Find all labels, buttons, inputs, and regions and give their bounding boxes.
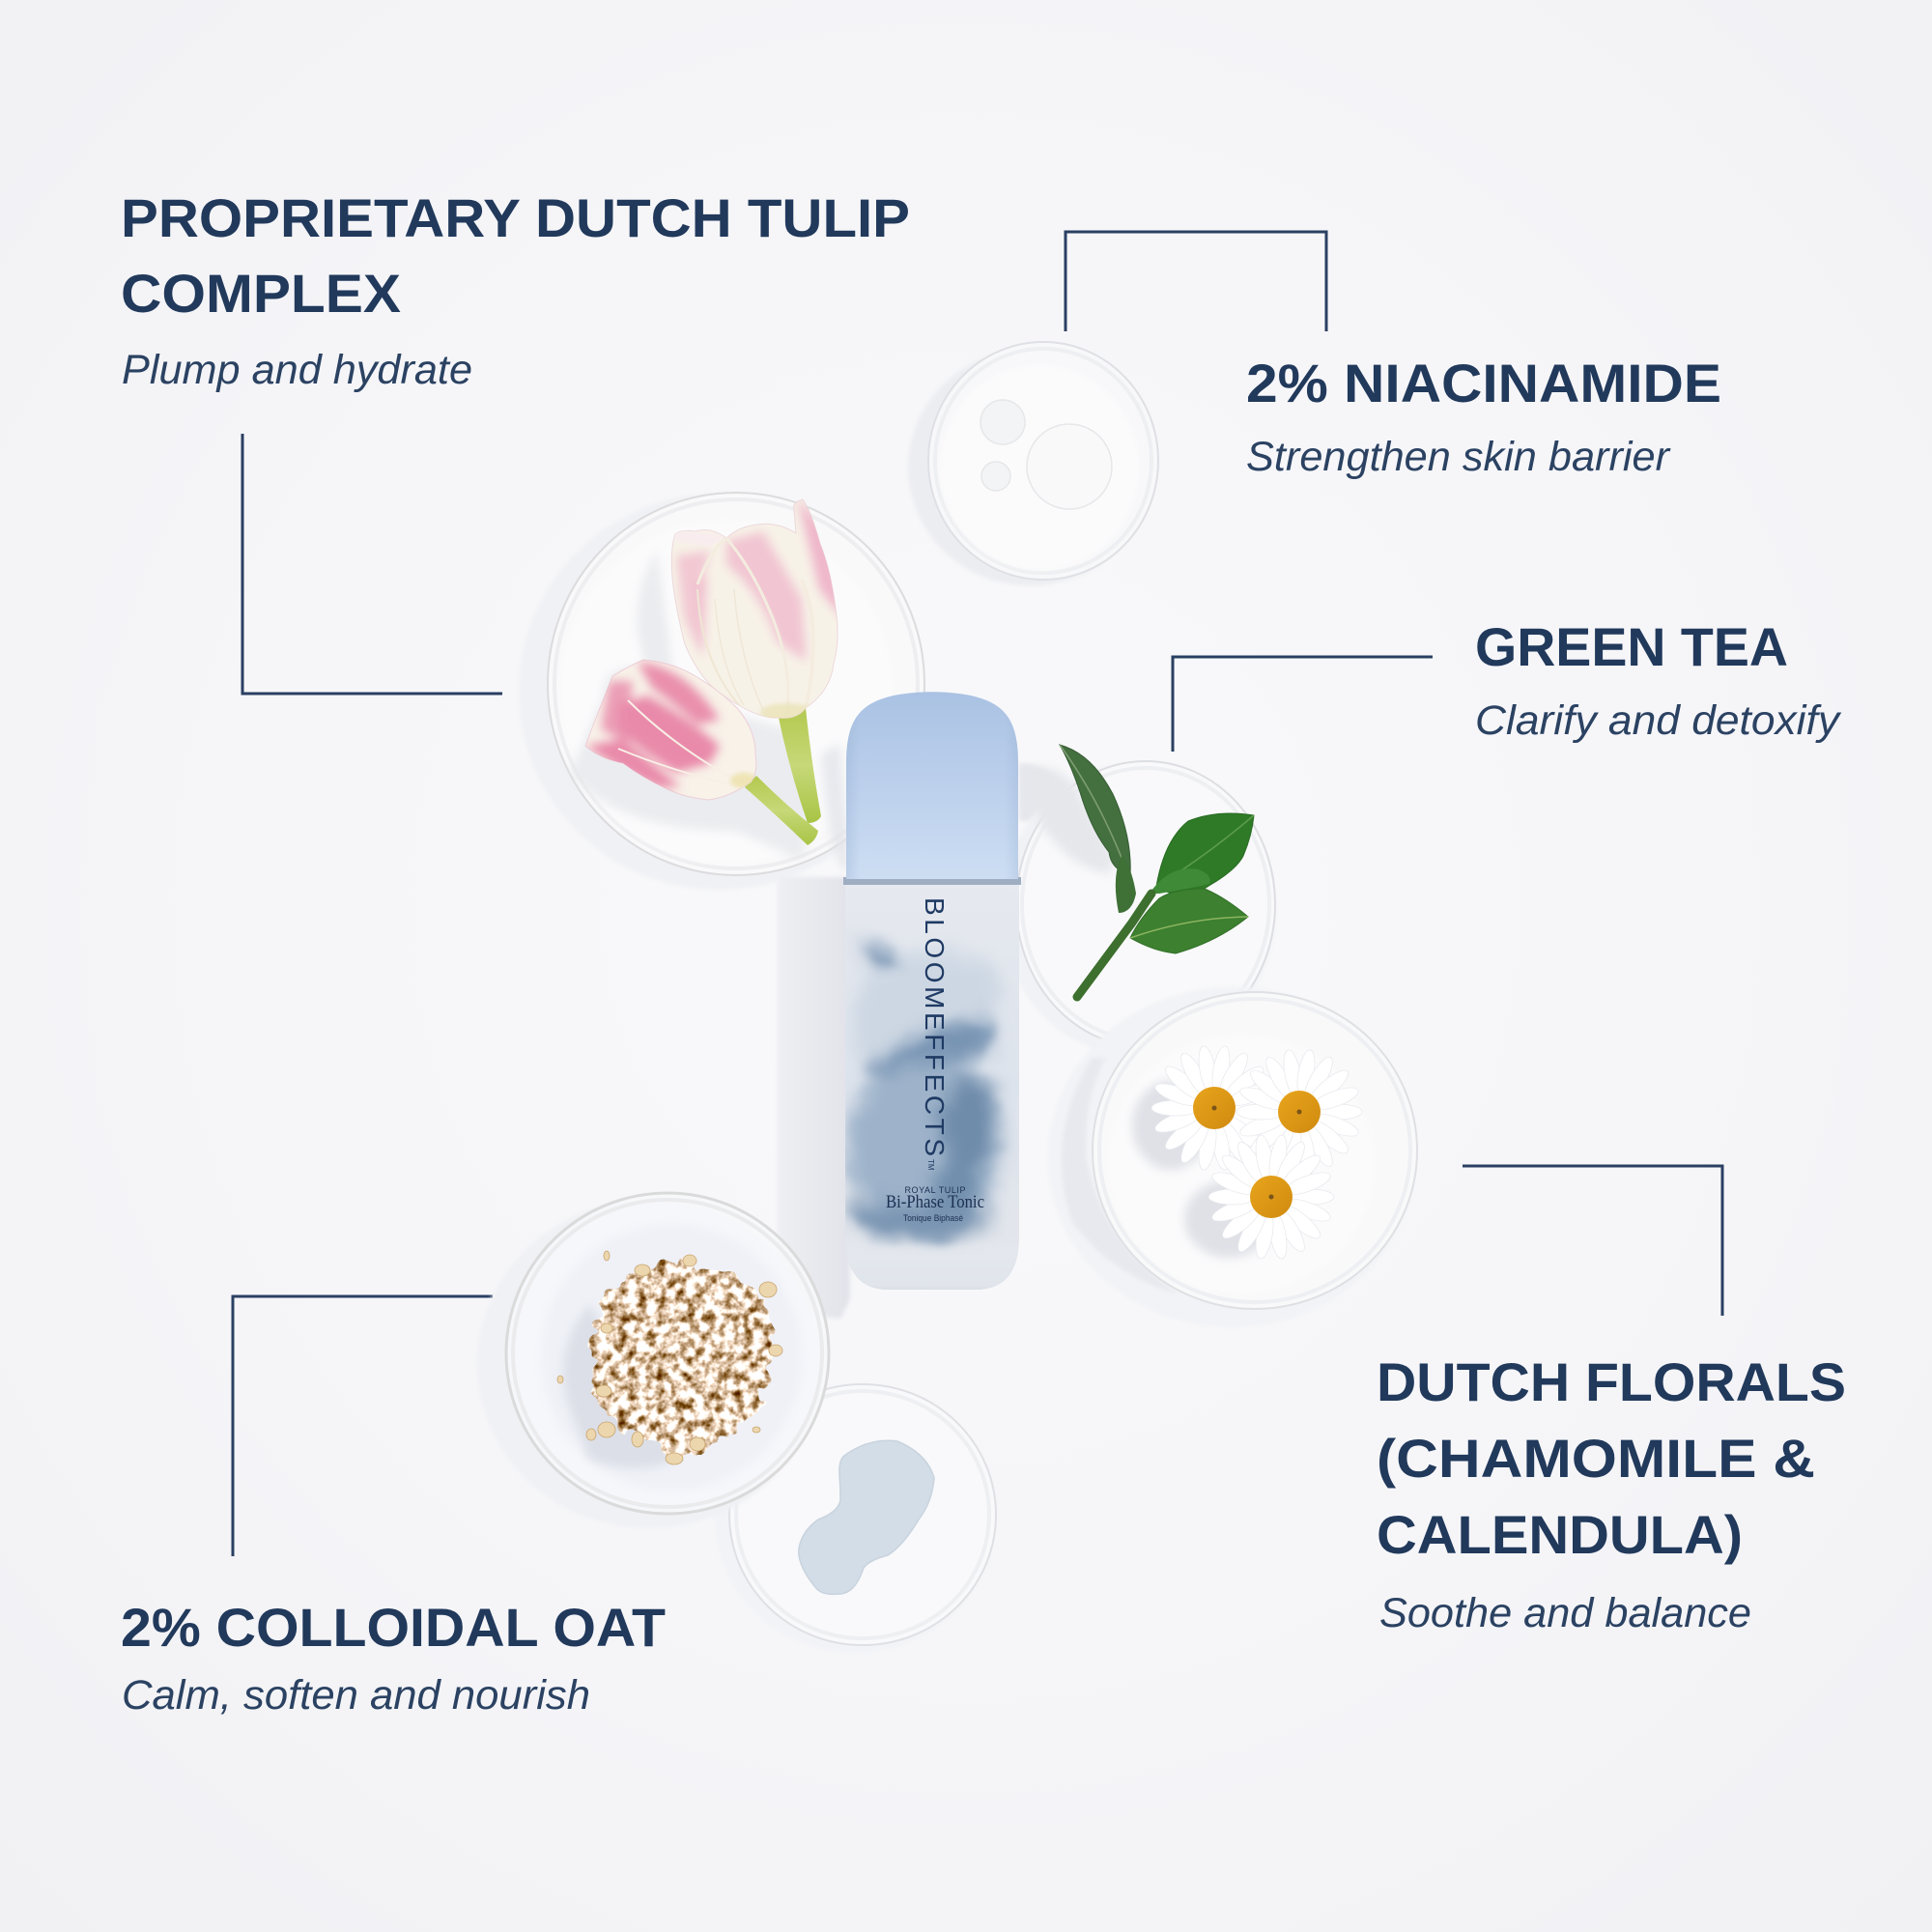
brand name: BLOOMEFFECTS bbox=[920, 897, 950, 1156]
tulip shadows bbox=[570, 551, 850, 870]
daisy 3 bbox=[1208, 1134, 1334, 1260]
petri dish: niacinamide droplets bbox=[908, 342, 1158, 585]
bottle shadow bbox=[778, 877, 850, 1319]
neck band bbox=[843, 877, 1021, 885]
heading block: proprietary dutch tulip complex bbox=[121, 187, 910, 393]
heading block: dutch florals: Soothe and balance bbox=[1379, 1590, 1751, 1636]
petri dish: daisies bbox=[1048, 987, 1417, 1327]
heading block: green tea bbox=[1475, 616, 1842, 744]
infographic canvas bbox=[123, 199, 1844, 1714]
heading block: dutch florals: (CHAMOMILE & bbox=[1377, 1428, 1815, 1489]
cap bbox=[846, 692, 1018, 879]
product labels: Tonique Biphasé bbox=[903, 1213, 963, 1224]
product labels: ROYAL TULIP bbox=[904, 1185, 966, 1195]
product labels bbox=[886, 1185, 984, 1224]
heading block: green tea: GREEN TEA bbox=[1475, 616, 1788, 677]
heading block: dutch florals bbox=[1377, 1351, 1846, 1636]
heading block: dutch florals: CALENDULA) bbox=[1377, 1504, 1743, 1565]
product bottle bbox=[840, 692, 1024, 1293]
marbled smoke bbox=[840, 942, 1024, 1293]
heading block: dutch florals: DUTCH FLORALS bbox=[1377, 1351, 1846, 1412]
upper tulip bbox=[671, 497, 842, 823]
heading block: niacinamide: 2% NIACINAMIDE bbox=[1246, 353, 1721, 413]
daisy shadows bbox=[1132, 1081, 1273, 1258]
heading block: proprietary dutch tulip complex: Plump and hydrate bbox=[122, 347, 472, 393]
tea sprig bbox=[1060, 745, 1254, 997]
petri dish: oats bbox=[477, 1193, 829, 1528]
tonic gel blob bbox=[799, 1440, 934, 1594]
daisy 2 bbox=[1236, 1049, 1362, 1175]
oat shadow bbox=[563, 1304, 676, 1468]
heading block: colloidal oat: Calm, soften and nourish bbox=[122, 1672, 590, 1719]
side shadow near cap bbox=[1019, 763, 1061, 821]
heading block: colloidal oat: 2% COLLOIDAL OAT bbox=[121, 1597, 666, 1658]
frosted body bbox=[845, 881, 1019, 1290]
heading block: niacinamide: Strengthen skin barrier bbox=[1246, 434, 1671, 480]
trademark: TM bbox=[926, 1159, 935, 1171]
rolled oats pile bbox=[557, 1251, 782, 1464]
droplets bbox=[980, 400, 1112, 509]
leader line: colloidal oat bbox=[233, 1296, 493, 1556]
heading block: proprietary dutch tulip complex: PROPRIETARY DUTCH TULIP bbox=[121, 187, 910, 248]
petri dish: green tea bbox=[1001, 745, 1275, 1057]
daisy 1 bbox=[1151, 1045, 1277, 1171]
leader line: green tea bbox=[1173, 657, 1433, 752]
product labels: Bi-Phase Tonic bbox=[886, 1192, 984, 1212]
petri dish: tulips bbox=[519, 493, 924, 890]
heading block: green tea: Clarify and detoxify bbox=[1475, 697, 1842, 744]
lower tulip bbox=[585, 660, 818, 845]
heading block: niacinamide bbox=[1246, 353, 1721, 480]
leader line: tulip bbox=[242, 434, 502, 694]
heading block: proprietary dutch tulip complex: COMPLEX bbox=[121, 263, 401, 324]
leader line: dutch florals bbox=[1463, 1166, 1722, 1316]
leader line: niacinamide bbox=[1065, 232, 1326, 331]
heading block: colloidal oat bbox=[121, 1597, 666, 1719]
petri dish: gel bbox=[715, 1384, 996, 1652]
